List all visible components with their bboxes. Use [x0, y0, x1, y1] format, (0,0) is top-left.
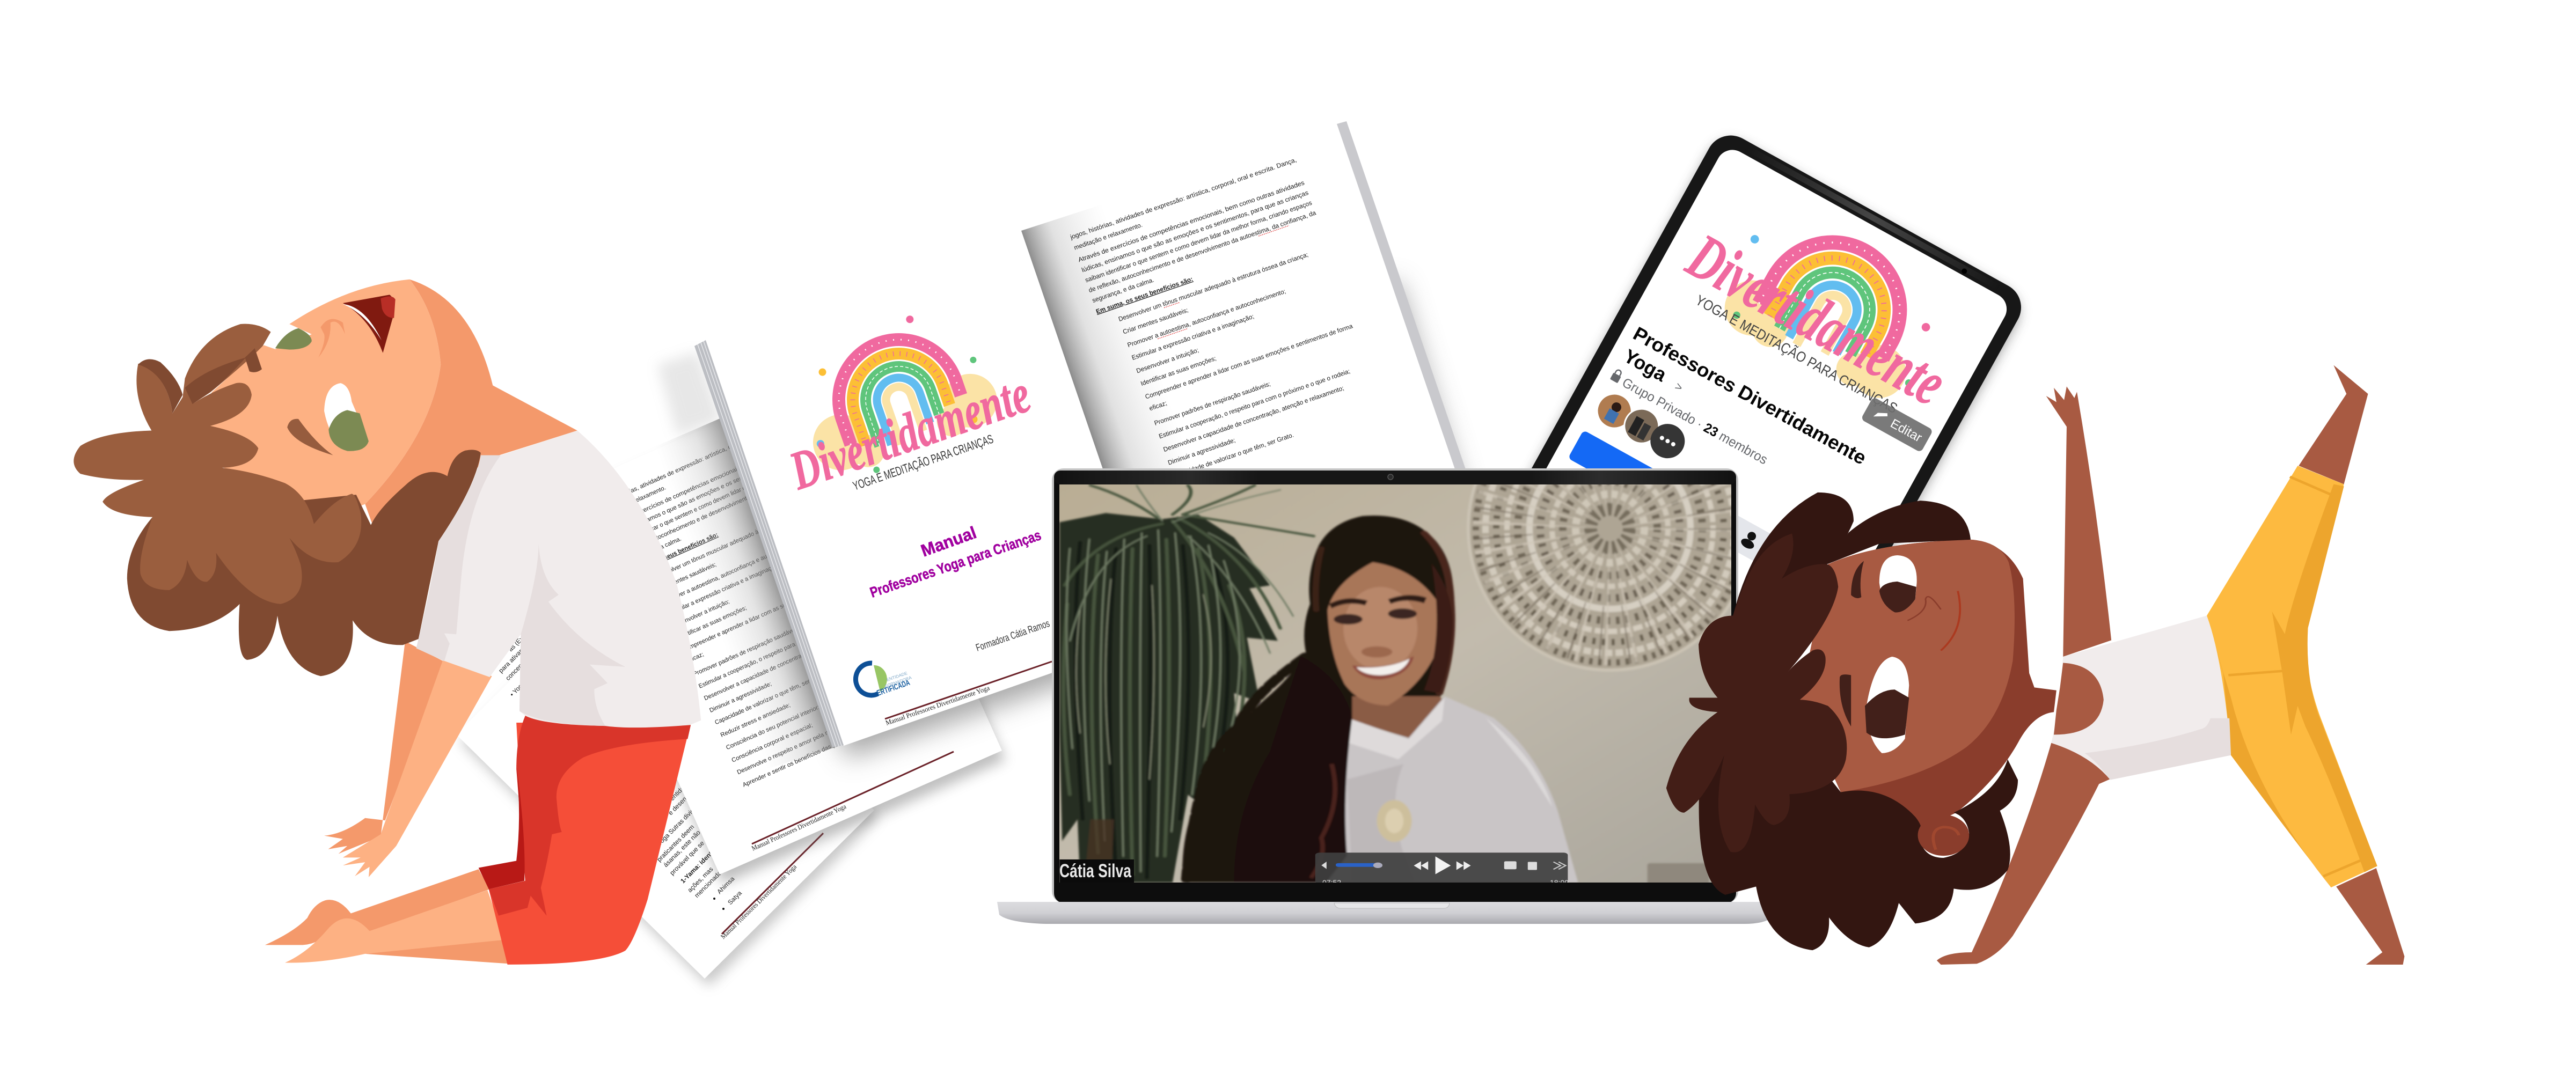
text: right page paragraphs: Capacidade de valorizar o que têm, ser Grato. — [1172, 431, 1294, 480]
icon: certification logo: ERTIFICADA — [876, 678, 911, 698]
panel: cover logo — [756, 287, 1041, 510]
girl: mouth — [343, 295, 396, 353]
child: face — [1799, 540, 2015, 792]
caption text: Cátia Silva: Cátia Silva — [1059, 861, 1131, 881]
heading: group name second line: Yoga — [1620, 344, 1671, 386]
girl: far arm — [324, 641, 445, 854]
text: right page paragraphs: lúdicas, ensinamos o que são as emoções e os sentimentos, para que as crianças — [1081, 189, 1309, 274]
text: left sheet paragraphs: Capacidade de valorizar o que têm, ser Grato. — [714, 671, 828, 726]
girl: lower eye — [324, 383, 369, 451]
text: left sheet paragraphs: Consciência do seu potencial interior; — [725, 704, 821, 751]
girl: front hair — [74, 324, 361, 604]
child: upper eye — [1879, 555, 1917, 613]
child: nose and cheek — [1907, 591, 1960, 650]
text: right page paragraphs: Promover a autoestima, autoconfiança e autoconhecimento; — [1126, 288, 1286, 349]
heading: Manual: Manual — [918, 523, 979, 561]
girl: t-shirt — [416, 431, 701, 727]
child: eyebrows — [1840, 561, 1864, 726]
page: bottom manual sheet: entidade — [668, 779, 691, 802]
girl: nose — [318, 319, 345, 357]
button: Editar — [1861, 397, 1933, 453]
text: left sheet paragraphs: Consciência corporal e espacial; — [731, 722, 814, 764]
text: trainer: Formadora Cátia Ramos — [975, 618, 1051, 654]
button: Editar: Editar — [1888, 416, 1924, 445]
girl: near arm — [343, 660, 492, 877]
shading: right page gutter — [1021, 203, 1246, 635]
footer: cover rule — [884, 662, 1052, 727]
page: bottom manual sheet: provável que se — [668, 839, 706, 877]
page: bottom manual sheet: ásanas, este não — [662, 828, 702, 869]
text: right page paragraphs: Identificar as suas emoções; — [1140, 355, 1217, 387]
girl: shorts — [479, 716, 691, 965]
shading: left page edge stack — [694, 340, 844, 747]
child: ear — [1918, 815, 1969, 856]
footer: cover rule: Manual Professores Divertidamente Yoga — [884, 684, 991, 727]
phone: Facebook group screen — [1487, 127, 2030, 720]
text: left sheet paragraphs: Identificar as suas emoções; — [676, 605, 748, 641]
overlay: player and caption — [1059, 852, 1568, 884]
scene: laptop-space shapes — [1059, 486, 1709, 885]
panel: cover logo: Divertidamente — [782, 363, 1038, 502]
text: right page paragraphs: Desenvolver a intuição; — [1135, 346, 1199, 374]
icon: add member — [1739, 529, 1760, 551]
player: elapsed time: 07:52 — [1322, 878, 1341, 887]
child: shoulder — [2054, 663, 2104, 734]
text: right page paragraphs: Desenvolver a capacidade de concentração, atenção e relaxamento; — [1162, 384, 1345, 453]
text: left sheet paragraphs: meditação e relaxamento. — [602, 484, 667, 518]
text: left sheet paragraphs: de reflexão, autoconhecimento e de desenvolvimento da autoestima, da confiança, da — [619, 459, 830, 557]
heading: group name: Professores Divertidamente — [1629, 322, 1870, 469]
plant: dark mass — [1059, 513, 1278, 883]
laptop lid — [1052, 468, 1738, 903]
shading: right page edge stack — [1337, 121, 1485, 528]
text: left sheet paragraphs: lúdicas, ensinamos o que são as emoções e os sentimentos, para que as crianças — [611, 440, 822, 539]
text: left sheet paragraphs — [597, 410, 936, 796]
text: privacy and members: > — [1673, 379, 1685, 394]
text: left sheet paragraphs: Em suma, os seus benefícios são: — [628, 532, 719, 577]
page: bottom manual sheet: as (Exercícios — [507, 619, 540, 653]
text: left sheet paragraphs: Compreender e aprender a lidar com as suas emoções e sentimentos de forma — [682, 563, 875, 653]
woman: long hair — [1182, 516, 1455, 883]
page: bottom manual sheet: Satya — [726, 889, 743, 906]
page: bottom manual sheet — [456, 566, 879, 986]
text: left sheet paragraphs: Reduzir stress e ansiedade; — [720, 702, 792, 739]
button: blue action — [1568, 430, 1724, 536]
player: background — [1315, 852, 1568, 884]
hoodie emblem — [1377, 800, 1412, 842]
page: left text sheet — [551, 371, 1005, 884]
player: total time: 18:09 — [1550, 878, 1569, 887]
girl: eyebrow — [287, 419, 333, 455]
text: right page paragraphs: eficaz; — [1148, 399, 1168, 412]
text: right page paragraphs: Criar mentes saudáveis; — [1122, 306, 1189, 336]
icon: certification logo: ENTIDADE — [886, 671, 908, 682]
text: left sheet paragraphs: Estimular a cooperação, o respeito para com o próximo e o que o rodeia; — [698, 606, 875, 690]
text: left sheet paragraphs: jogos, histórias, atividades de expressão: artística, corporal, oral e escrita. Dança, — [597, 410, 807, 509]
text: left sheet paragraphs: Aprender e sentir os benefícios das posturas; — [742, 732, 857, 789]
page: bottom manual sheet: • Yoga — [508, 680, 527, 698]
character: girl in camel pose — [74, 280, 701, 965]
girl: face — [209, 280, 441, 525]
icon: webcam — [1388, 474, 1393, 480]
woman: neck — [1352, 696, 1445, 738]
child: dark back hair — [1699, 493, 2018, 950]
child: supporting arm — [1937, 743, 2110, 965]
panel: phone logo — [1708, 200, 1958, 418]
page: bottom manual sheet: Yoga Sutras divide — [655, 804, 699, 847]
child: upper foot — [2299, 365, 2368, 484]
photo contents — [1059, 484, 1731, 883]
text: phone logo subtitle: YOGA E MEDITAÇÃO PARA CRIANÇAS — [1693, 291, 1900, 416]
woman: hair over shoulder — [1234, 656, 1352, 883]
video frame: instructor — [1059, 484, 1731, 883]
girl: back hair — [127, 450, 481, 676]
text: right page paragraphs: Através de exercícios de competências emocionais, bem como outras atividades — [1077, 179, 1305, 263]
page: bottom manual sheet: mencionadas — [693, 867, 726, 899]
text: right page paragraphs: Estimular a cooperação, o respeito para com o próximo e o que o rodeia; — [1158, 368, 1351, 440]
player: play — [1436, 856, 1451, 874]
girl: head and neck shade — [365, 280, 577, 523]
text: left sheet paragraphs: Criar mentes saudáveis; — [655, 562, 718, 594]
player: share icons — [1504, 861, 1566, 870]
text: right page paragraphs: Promover padrões de respiração saudáveis; — [1153, 380, 1271, 427]
page: bottom manual sheet: e desenvolver — [667, 783, 700, 817]
text: left sheet paragraphs: Através de exercícios de competências emocionais, bem como outras atividades — [607, 431, 817, 530]
text: right page paragraphs — [1069, 156, 1383, 486]
text: privacy and members — [1608, 350, 1781, 467]
page: bottom manual sheet: Manual Professores Divertidamente Yoga — [719, 863, 798, 940]
text: right page paragraphs: saibam identificar o que sentem e como devem lidar da melhor forma, criando espaços — [1084, 199, 1313, 284]
text: right page paragraphs: segurança, e da calma. — [1091, 276, 1155, 304]
text: left sheet paragraphs: Desenvolver um tônus muscular adequado à estrutura óssea da criança; — [650, 499, 826, 582]
plant: trunk — [1086, 819, 1115, 859]
shading: left page gutter — [656, 417, 840, 769]
text: right page paragraphs: jogos, histórias, atividades de expressão: artística, corporal, oral e escrita. Dança, — [1069, 156, 1298, 241]
character: child in side plank — [1666, 365, 2404, 965]
text: left sheet paragraphs: Desenvolver a intuição; — [671, 599, 730, 630]
woman: face — [1328, 562, 1440, 705]
avatars: members — [1591, 388, 1691, 465]
girl: near leg — [285, 890, 505, 963]
player: forward — [1457, 861, 1471, 870]
page: left text sheet: Manual Professores Divertidamente Yoga — [750, 802, 847, 852]
player: rewind — [1414, 861, 1428, 870]
child: front hair — [1666, 533, 1847, 852]
text: left sheet paragraphs: Desenvolver a capacidade de concentração, atenção e relaxamento; — [703, 622, 871, 702]
child: raised arm — [2046, 386, 2111, 657]
page: bottom manual sheet: praticantes deem — [655, 823, 696, 863]
text: right page paragraphs: Compreender e aprender a lidar com as suas emoções e sentimentos de forma — [1144, 322, 1354, 401]
text: left sheet paragraphs: Promover padrões de respiração saudáveis; — [692, 624, 801, 678]
icon: certification logo — [855, 663, 912, 698]
laptop — [997, 387, 1776, 924]
laptop base — [997, 902, 1776, 924]
shading: soft shadow above left sheet — [657, 351, 722, 436]
text: left sheet paragraphs: Desenvolve o respeito e amor pela natureza; — [736, 721, 850, 776]
chair at right — [1648, 863, 1709, 885]
text: right page paragraphs: Estimular a expressão criativa e a imaginação; — [1131, 312, 1255, 362]
panel: cover logo: YOGA E MEDITAÇÃO PARA CRIANÇAS — [851, 432, 995, 493]
player: volume — [1321, 862, 1382, 869]
text: left sheet paragraphs: saibam identificar o que sentem e como devem lidar da melhor forma, criando espaços — [615, 450, 825, 548]
heading: course name: Professores Yoga para Crianças — [868, 527, 1043, 601]
heading: phone logo title: Divertidamente — [1676, 219, 1958, 419]
text: right page paragraphs: Desenvolver um tônus muscular adequado à estrutura óssea da criança; — [1117, 251, 1309, 323]
page: bottom manual sheet: 1-Yama: identificar — [679, 839, 725, 885]
woman: side hair — [1424, 564, 1453, 693]
text: right page paragraphs: Em suma, os seus benefícios são: — [1095, 275, 1194, 315]
text: privacy and members: Grupo Privado · 23 membros — [1620, 375, 1770, 467]
text: left sheet paragraphs: segurança, e da calma. — [624, 536, 683, 567]
caption: name backdrop — [1059, 859, 1134, 883]
icon: certification logo: FORMADORA — [884, 675, 912, 689]
girl: hair shadows — [138, 348, 262, 413]
child: trousers — [2207, 466, 2377, 887]
child: lower foot — [2336, 868, 2404, 965]
text: right page paragraphs: Diminuir a agressividade; — [1167, 436, 1236, 467]
child: head shade and neck — [1799, 540, 2057, 829]
woman: smile — [1352, 656, 1414, 679]
child: lower eye — [1865, 657, 1909, 753]
laptop notch — [1334, 903, 1450, 908]
woman: wavy hair edges — [1187, 533, 1452, 883]
button: grey add member — [1714, 511, 1846, 604]
page: bottom manual sheet: Ahimsa — [715, 875, 736, 895]
page: bottom manual sheet: ações, mas — [686, 865, 715, 894]
girl: upper eye — [262, 324, 312, 350]
booklet: cover and right page — [656, 121, 1485, 769]
plant: fronds — [1064, 486, 1314, 878]
page: bottom manual sheet: para ativar — [497, 648, 524, 674]
text: left sheet paragraphs: Estimular a expressão criativa e a imaginação; — [665, 562, 780, 618]
text: left sheet paragraphs: Promover a autoestima, autoconfiança e autoconhecimento; — [661, 535, 808, 606]
text: left sheet paragraphs: eficaz; — [686, 651, 705, 664]
girl: far leg — [265, 869, 489, 945]
text: right page paragraphs: meditação e relaxamento. — [1073, 221, 1144, 252]
decor: carved mandala — [1467, 484, 1731, 672]
text: right page paragraphs: de reflexão, autoconhecimento e de desenvolvimento da autoestima, da confiança, da — [1088, 209, 1317, 294]
woman: hoodie — [1260, 696, 1578, 883]
page: bottom manual sheet: concentração — [504, 649, 537, 682]
text: left sheet paragraphs: Diminuir a agressividade; — [708, 681, 773, 714]
child: t-shirt — [2051, 615, 2231, 780]
woman: brows and eyes — [1329, 595, 1426, 624]
